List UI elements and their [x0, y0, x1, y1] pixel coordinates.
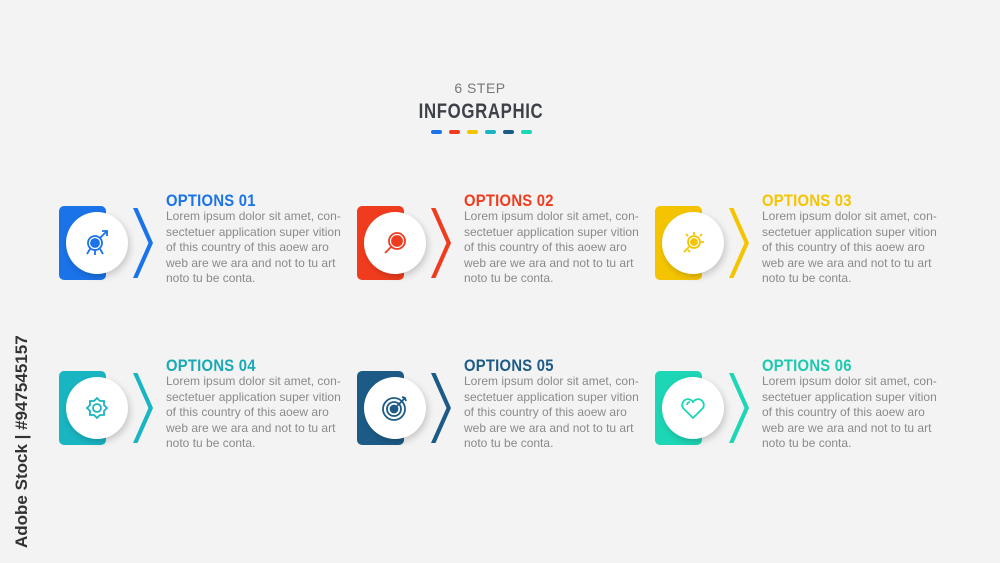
- watermark vertical text: Adobe Stock | #947545157: [12, 335, 31, 548]
- panel: option 03: of this country of this aoew aro: [762, 240, 925, 254]
- panel: option 01: sectetuer application super vition: [166, 225, 341, 239]
- panel: option 06: of this country of this aoew aro: [762, 405, 925, 419]
- text: OPTIONS 04: [166, 356, 256, 375]
- icon: heart: [662, 377, 724, 439]
- icon: magnifier: [364, 212, 426, 274]
- arrow: chevron: [431, 373, 451, 443]
- icon: target: [364, 377, 426, 439]
- panel: option 01: [59, 191, 341, 285]
- panel: option 06: Lorem ipsum dolor sit amet, con-: [762, 374, 937, 388]
- text: OPTIONS 01: [166, 191, 256, 210]
- arrow: chevron: [729, 373, 749, 443]
- icon: gear: [66, 377, 128, 439]
- panel: option 06: noto tu be conta.: [762, 436, 851, 450]
- panel: option 05: [357, 356, 639, 450]
- panel: option 01: noto tu be conta.: [166, 271, 255, 285]
- panel: option 03: web are we ara and not to tu art: [762, 256, 931, 270]
- arrow: chevron: [133, 208, 153, 278]
- text: OPTIONS 03: [762, 191, 852, 210]
- panel: option 04: of this country of this aoew aro: [166, 405, 329, 419]
- panel: option 05: sectetuer application super vition: [464, 390, 639, 404]
- panel: option 04: [59, 356, 341, 450]
- arrow: chevron: [133, 373, 153, 443]
- panel: option 04: sectetuer application super vition: [166, 390, 341, 404]
- panel: option 02: noto tu be conta.: [464, 271, 553, 285]
- panel: option 02: of this country of this aoew aro: [464, 240, 627, 254]
- panel: option 04: web are we ara and not to tu art: [166, 421, 335, 435]
- arrow: chevron: [431, 208, 451, 278]
- panel: option 01: of this country of this aoew aro: [166, 240, 329, 254]
- panel: option 02: web are we ara and not to tu art: [464, 256, 633, 270]
- panel: option 06: [655, 356, 937, 450]
- text: OPTIONS 05: [464, 356, 554, 375]
- panel: option 02: Lorem ipsum dolor sit amet, con-: [464, 209, 639, 223]
- color dash legend: [431, 130, 532, 134]
- panel: option 04: Lorem ipsum dolor sit amet, con-: [166, 374, 341, 388]
- panel: option 05: of this country of this aoew aro: [464, 405, 627, 419]
- panel: option 03: Lorem ipsum dolor sit amet, con-: [762, 209, 937, 223]
- panel: option 02: sectetuer application super vition: [464, 225, 639, 239]
- icon: gender symbol: [66, 212, 128, 274]
- panel: option 03: noto tu be conta.: [762, 271, 851, 285]
- panel: option 04: noto tu be conta.: [166, 436, 255, 450]
- panel: option 02: [357, 191, 639, 285]
- arrow: chevron: [729, 208, 749, 278]
- panel: option 06: sectetuer application super vition: [762, 390, 937, 404]
- title: INFOGRAPHIC: [419, 100, 543, 123]
- panel: option 03: [655, 191, 937, 285]
- panel: option 03: sectetuer application super vition: [762, 225, 937, 239]
- panel: option 01: web are we ara and not to tu art: [166, 256, 335, 270]
- icon: bulb: [662, 212, 724, 274]
- panel: option 01: Lorem ipsum dolor sit amet, con-: [166, 209, 341, 223]
- panel: option 05: web are we ara and not to tu art: [464, 421, 633, 435]
- panel: option 05: noto tu be conta.: [464, 436, 553, 450]
- panel: option 06: web are we ara and not to tu art: [762, 421, 931, 435]
- panel: option 05: Lorem ipsum dolor sit amet, con-: [464, 374, 639, 388]
- text: OPTIONS 06: [762, 356, 852, 375]
- text: OPTIONS 02: [464, 191, 554, 210]
- subtitle: 6 STEP: [454, 80, 506, 96]
